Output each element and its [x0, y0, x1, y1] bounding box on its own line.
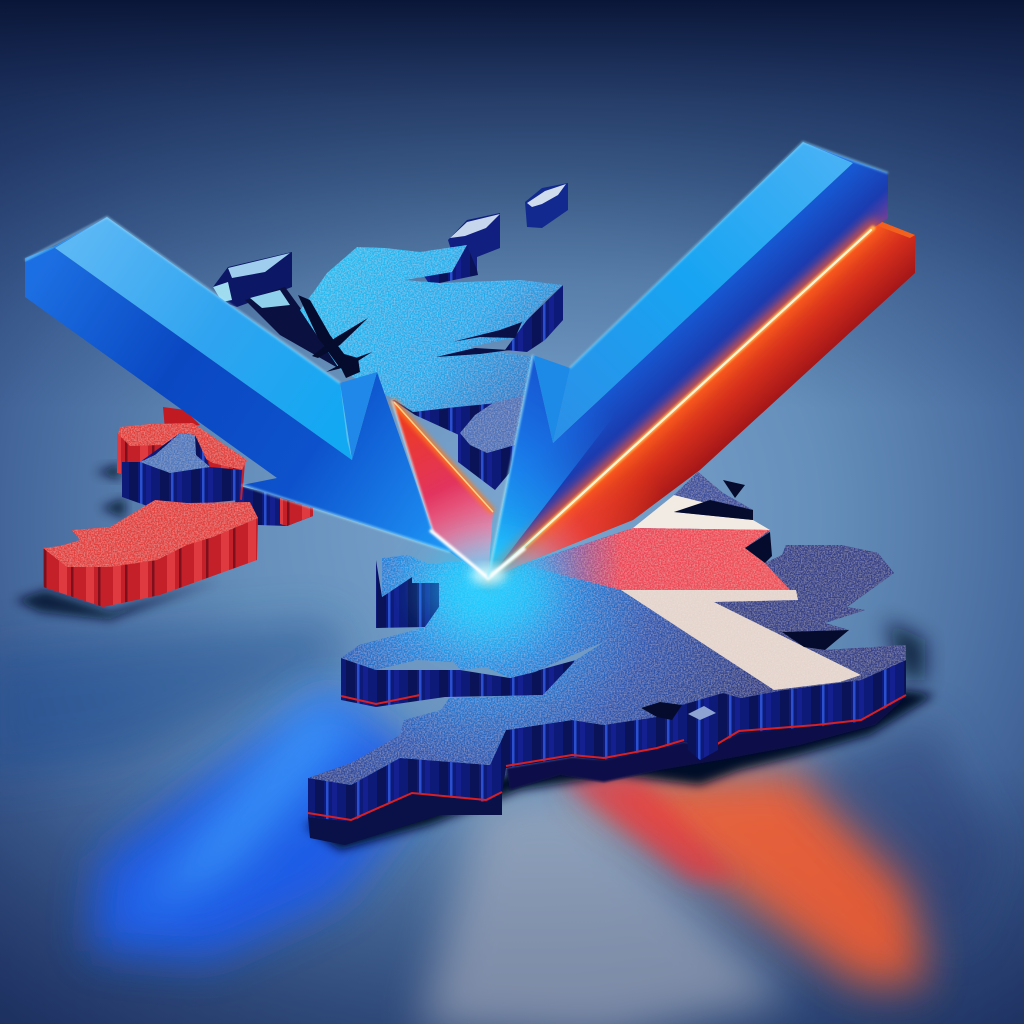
map: Scotland extrusion: [392, 245, 563, 440]
map: Wales and England extrusion: [308, 560, 906, 845]
glowing impact point: [392, 355, 552, 632]
arrow: red lower band of right arrow: [488, 222, 915, 580]
map: Scotland top surface: [300, 245, 563, 412]
map shadows: [15, 464, 935, 850]
Red edge line: [308, 695, 906, 820]
Republic of Ireland body: [43, 500, 258, 607]
floor reflections: blue and orange light: [0, 620, 1000, 1024]
Shetland: [525, 183, 568, 228]
right arrow light face: [553, 142, 853, 443]
left arrow dark face: [25, 248, 488, 580]
North Wales side: [341, 658, 576, 707]
map: east coast dark cuts: [641, 480, 849, 720]
map: Scottish islands: [213, 183, 568, 372]
map: Ireland in red: [43, 407, 313, 607]
Irish strip behind: [235, 485, 313, 526]
red wedge between arrows: [392, 400, 493, 578]
arrow rim highlights: [25, 142, 888, 552]
Outer Hebrides: [213, 252, 292, 307]
map: small Isle of Wight block: [686, 704, 718, 760]
map: Scotland lower lobe: [458, 395, 525, 490]
Orkney: [448, 213, 500, 270]
map: Scotland west coast black inlets: [298, 295, 372, 378]
arrow: left blue: [25, 217, 488, 580]
right arrow fin: [533, 355, 570, 443]
flag: red cross band: [523, 528, 790, 590]
Inner Hebrides: [245, 287, 345, 372]
arrow: right blue: [488, 142, 888, 580]
wedge glowing edge: [392, 400, 493, 512]
left arrow fin: [340, 372, 377, 460]
Reflection under base: [308, 793, 502, 845]
glowing line along right arrow: [488, 228, 873, 580]
flag: white bands: [621, 495, 861, 690]
map: Scotland firth slits: [436, 322, 522, 357]
left arrow end cap: [25, 217, 107, 262]
left arrow light face: [55, 217, 352, 460]
Anglesey side: [376, 560, 439, 628]
right arrow end cap top: [803, 142, 888, 173]
north coast red block: [117, 407, 247, 500]
flag: dark blue east panel: [714, 545, 906, 680]
right arrow head glow: [488, 330, 680, 580]
flag: north dark triangle: [674, 472, 753, 510]
Northern Ireland blue block: [122, 433, 242, 508]
right arrow dark face: [488, 163, 888, 580]
South England side: [308, 655, 906, 822]
map: England and Wales top surface: [308, 472, 906, 785]
